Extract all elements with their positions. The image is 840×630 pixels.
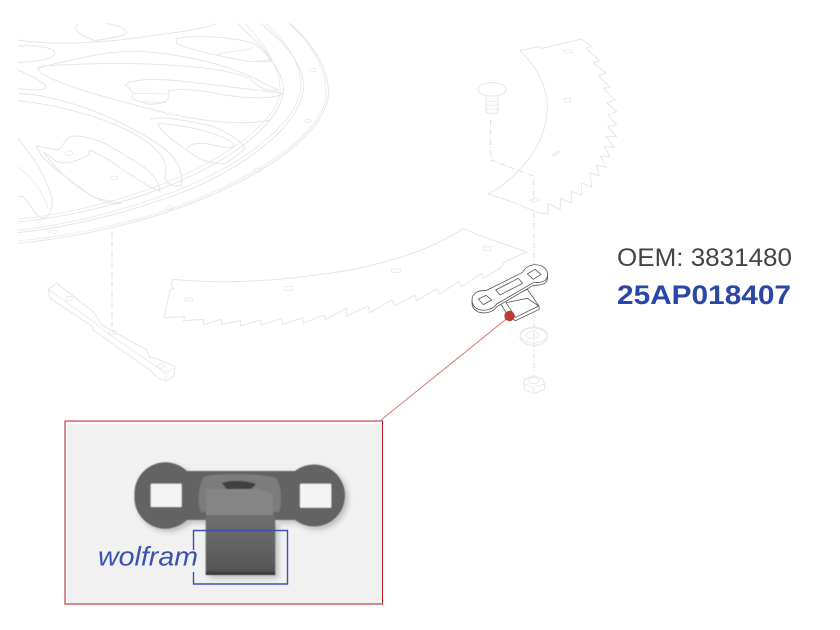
bolt line drawing (478, 83, 506, 113)
wheel assembly line drawing (18, 23, 328, 243)
support bar line drawing (48, 283, 175, 381)
red callout dot (504, 311, 515, 321)
nut line drawing (523, 376, 545, 393)
wolfram bracket (194, 530, 288, 584)
wolfram label: wolfram (98, 542, 198, 572)
photo: plate with wolfram tab (134, 462, 348, 578)
detail photo panel (65, 421, 382, 604)
curved serrated blade, lower left (164, 228, 527, 326)
part number block (617, 244, 792, 310)
highlighted part: mounting plate (472, 265, 548, 321)
OEM number: OEM: 3831480 (617, 244, 792, 272)
washer line drawing (520, 327, 547, 345)
curved serrated blade, right (488, 39, 617, 213)
dashed guide lines (112, 120, 534, 372)
part number: 25AP018407 (617, 280, 791, 310)
connector line to detail photo (381, 316, 510, 420)
